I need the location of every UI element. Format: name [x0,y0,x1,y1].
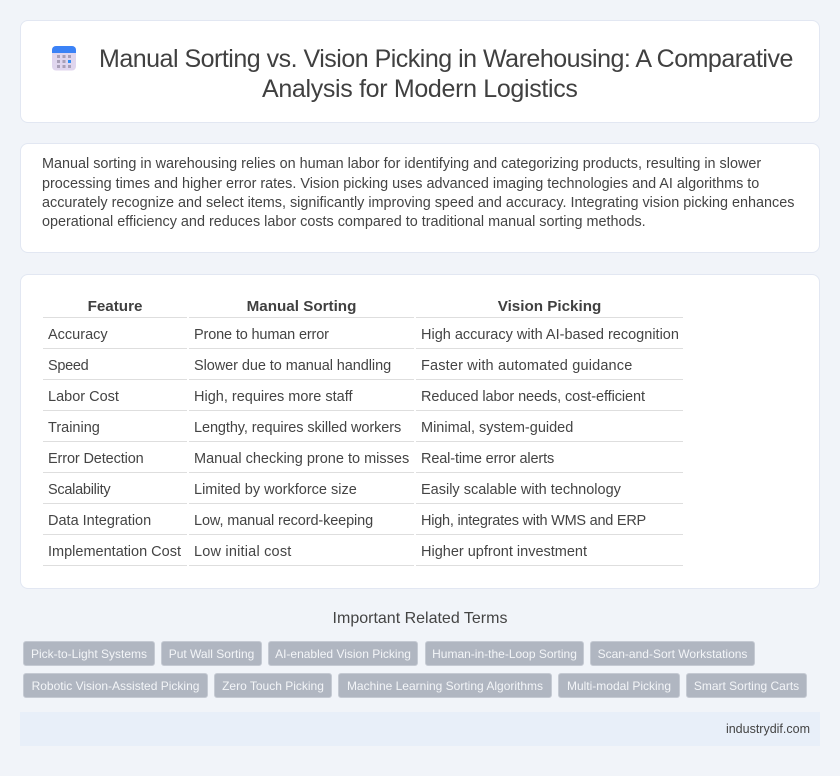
title [99,45,793,103]
title: Manual Sorting vs. Vision Picking in Warehousing: A Comparative [99,45,793,73]
comparison table: High, integrates with WMS and ERP [421,513,646,529]
comparison table: Training [48,420,100,436]
comparison table: Error Detection [48,451,144,467]
comparison table: Easily scalable with technology [421,482,621,498]
related term tags: Scan-and-Sort Workstations [598,647,747,661]
related term tags: Multi-modal Picking [567,679,671,693]
intro paragraph: Manual sorting in warehousing relies on human labor for identifying and categorizing products, resulting in slower [42,156,761,172]
comparison table: Limited by workforce size [194,482,357,498]
comparison table [43,298,683,566]
panel: intro paragraph card [20,143,820,253]
comparison table: Low initial cost [194,544,292,560]
comparison table: High accuracy with AI-based recognition [421,327,679,343]
comparison table: Higher upfront investment [421,544,587,560]
comparison table: Feature [88,298,142,315]
panel: comparison table card [20,274,820,589]
related term tags: Human-in-the-Loop Sorting [432,647,577,661]
comparison table: Accuracy [48,327,108,343]
comparison table: Labor Cost [48,389,119,405]
comparison table: Slower due to manual handling [194,358,391,374]
comparison table: Faster with automated guidance [421,358,632,374]
related term tags: Put Wall Sorting [169,647,254,661]
comparison table: Minimal, system-guided [421,420,573,436]
comparison table: Implementation Cost [48,544,181,560]
related term tags: Zero Touch Picking [222,679,324,693]
related term tags: AI-enabled Vision Picking [275,647,411,661]
panel: title card [20,20,820,123]
comparison table: Data Integration [48,513,151,529]
icon: calendar grid [52,46,76,70]
related term tags: Smart Sorting Carts [694,679,799,693]
title: Analysis for Modern Logistics [262,75,578,103]
comparison table: Prone to human error [194,327,329,343]
related term tags: Machine Learning Sorting Algorithms [347,679,543,693]
comparison table: Low, manual record-keeping [194,513,373,529]
intro paragraph: accurately recognize and select items, significantly improving speed and accuracy. Integrating vision picking enhances [42,195,794,211]
footer bar [20,712,820,746]
comparison table: Speed [48,358,88,374]
heading: related terms: Important Related Terms [333,610,507,627]
comparison table: Scalability [48,482,110,498]
footer source text: industrydif.com [726,722,810,736]
comparison table: Lengthy, requires skilled workers [194,420,401,436]
intro paragraph [42,156,794,230]
related term tags: Pick-to-Light Systems [31,647,147,661]
related term tags [23,641,807,698]
related term tags: Robotic Vision-Assisted Picking [32,679,199,693]
comparison table: High, requires more staff [194,389,352,405]
comparison table: Manual checking prone to misses [194,451,409,467]
intro paragraph: processing times and higher error rates. Vision picking uses advanced imaging technologies and AI algorithms to [42,176,759,192]
comparison table: Manual Sorting [247,298,356,315]
intro paragraph: operational efficiency and reduces labor costs compared to traditional manual sorting methods. [42,214,646,230]
comparison table: Reduced labor needs, cost-efficient [421,389,645,405]
comparison table: Vision Picking [498,298,601,315]
comparison table: Real-time error alerts [421,451,554,467]
